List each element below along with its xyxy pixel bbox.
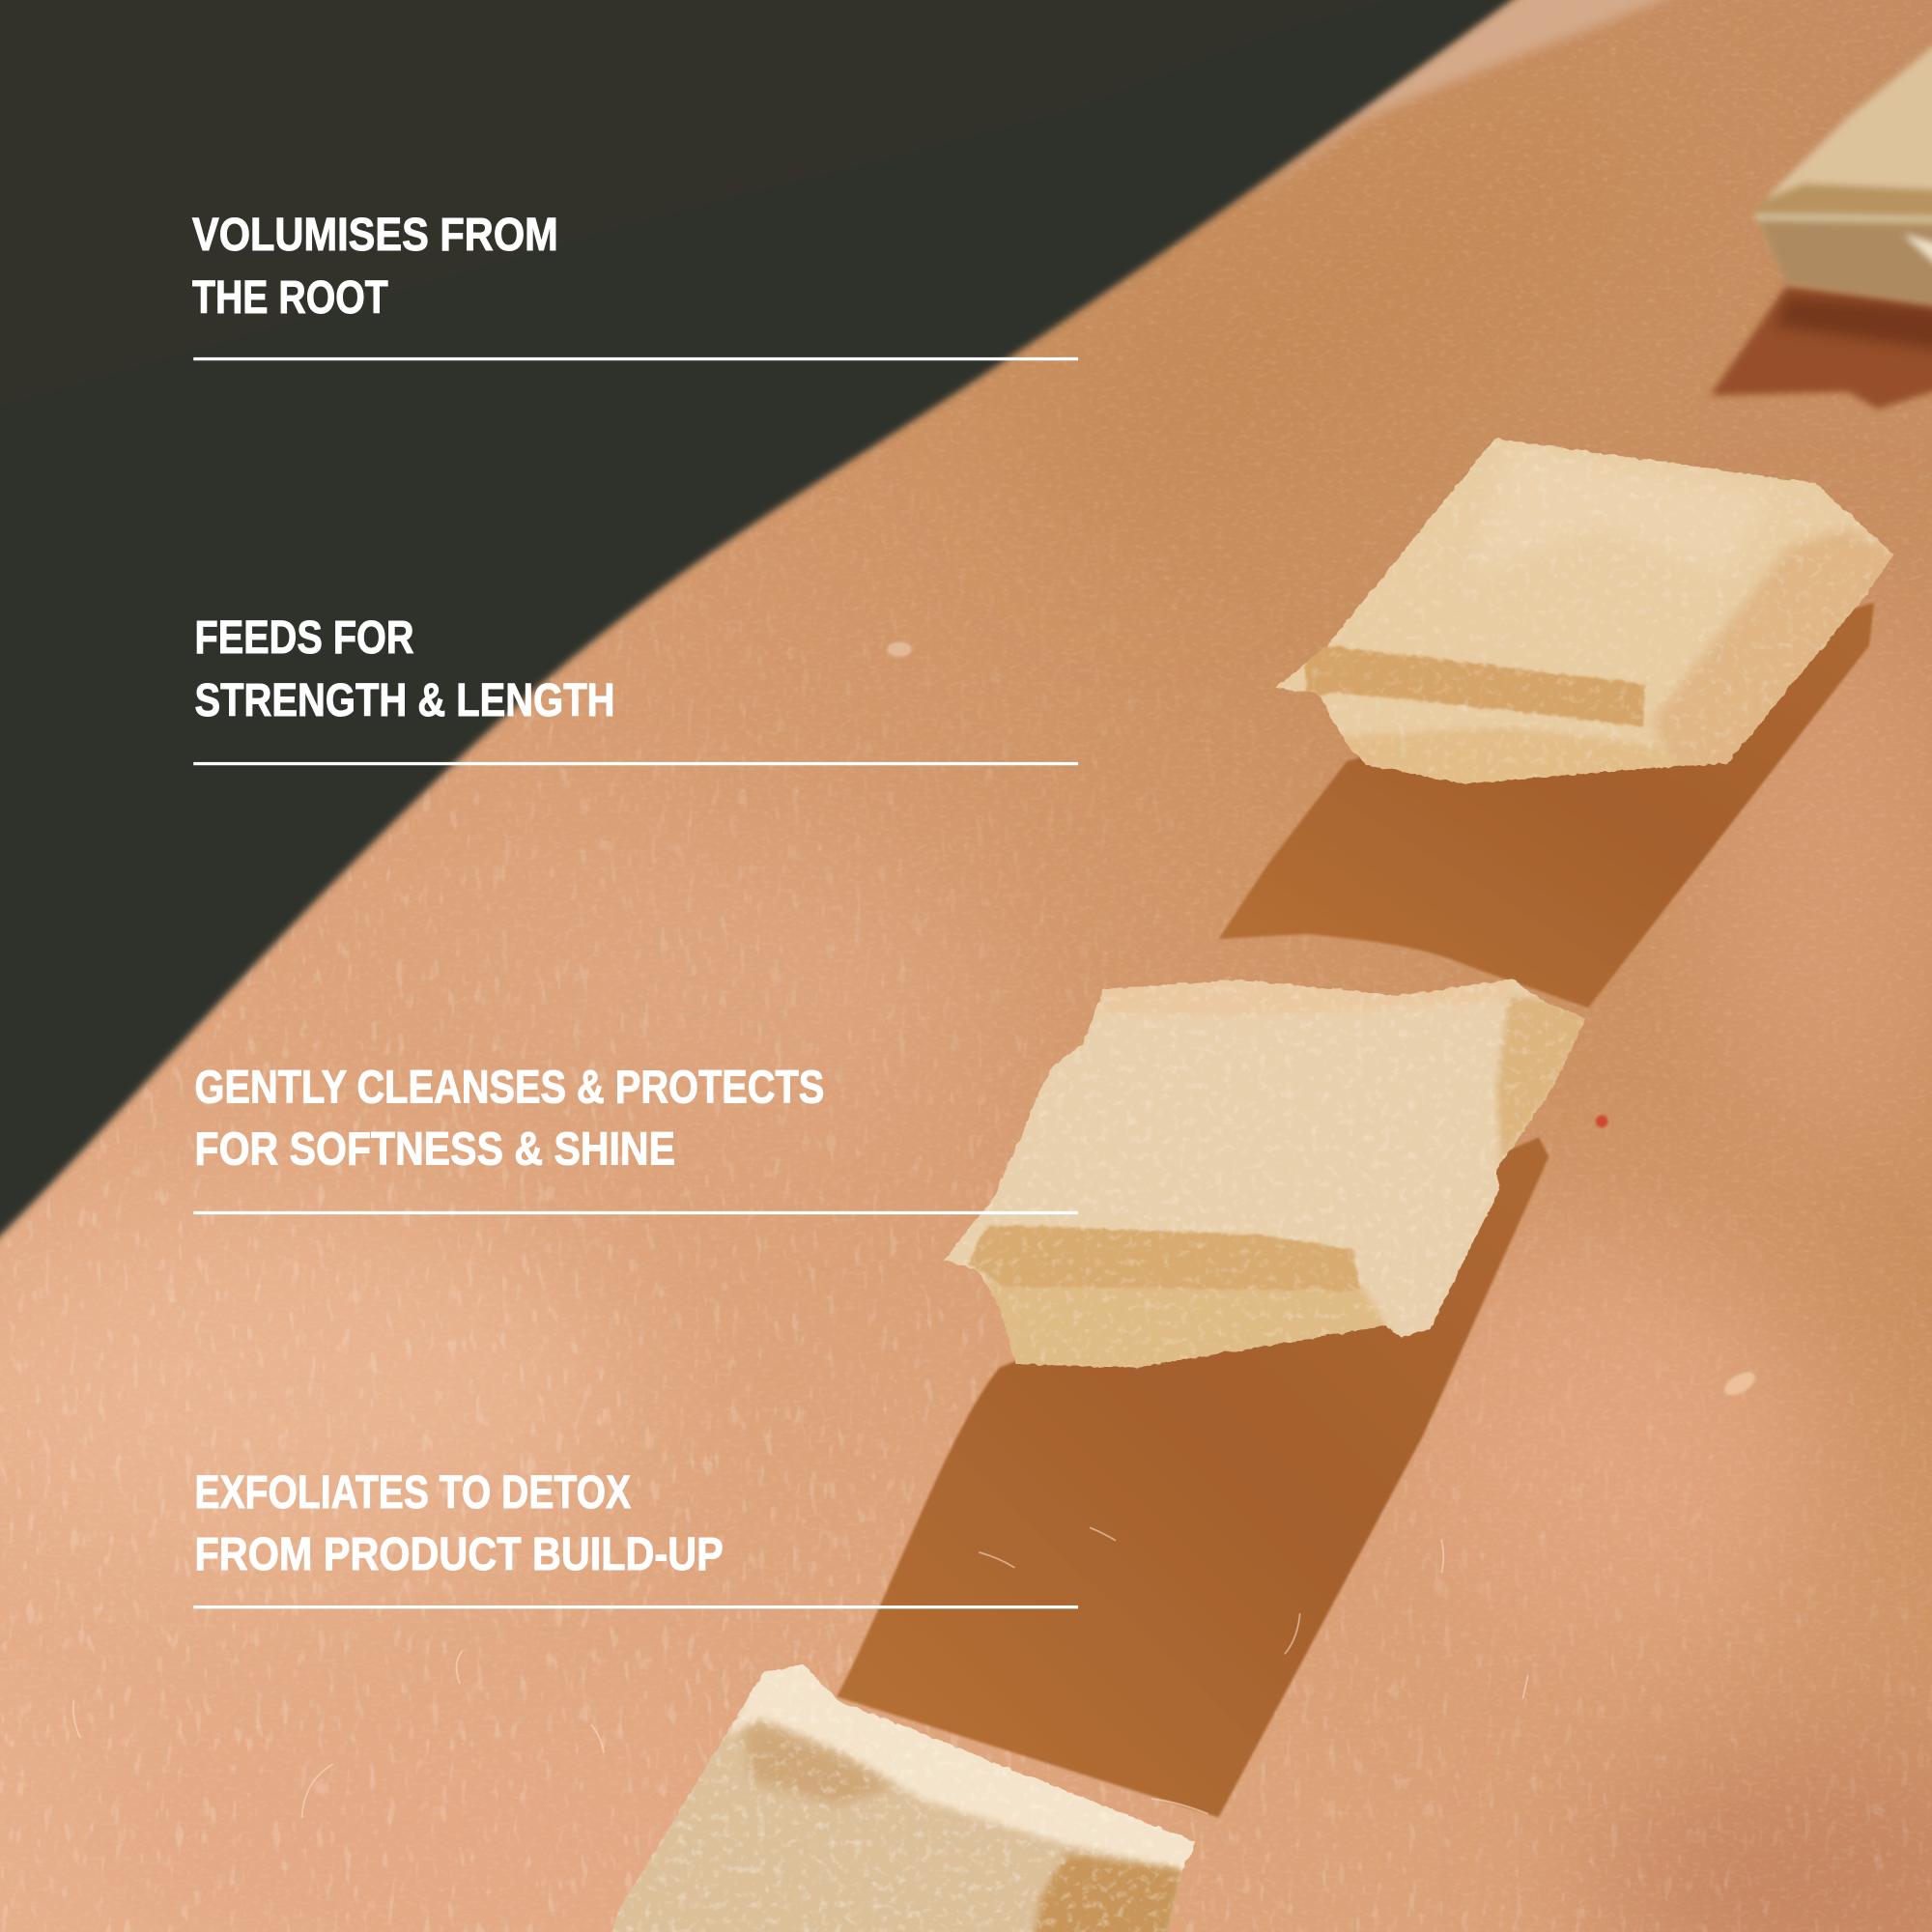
soap bar 1 <box>1754 37 1932 308</box>
benefit 2 heading: FEEDS FOR <box>195 611 414 664</box>
skin details: blemish and flecks <box>73 642 1759 1817</box>
soap bar 3 <box>943 980 1585 1369</box>
benefit 3 <box>193 1062 1078 1214</box>
benefit 3 heading: FOR SOFTNESS & SHINE <box>195 1122 675 1175</box>
soap bar 4 <box>604 1651 1208 1932</box>
benefit 2 <box>193 611 1078 765</box>
bar 1 shadow <box>1710 286 1932 409</box>
bar 2 shadow <box>1218 603 1874 1008</box>
benefit 4 heading: FROM PRODUCT BUILD-UP <box>195 1528 724 1580</box>
benefit 4 heading: EXFOLIATES TO DETOX <box>195 1466 631 1519</box>
benefit 1 heading <box>192 209 558 324</box>
background: dark shadow area <box>0 0 1552 1273</box>
benefit 2 heading <box>195 611 614 726</box>
benefit 4 <box>193 1466 1078 1608</box>
benefit 1 <box>192 209 1078 360</box>
benefit 1 heading: VOLUMISES FROM <box>192 209 558 261</box>
skin highlight along the shadow edge <box>1244 0 1688 203</box>
benefit 3 heading <box>195 1062 824 1175</box>
benefit 4 heading <box>195 1466 724 1580</box>
bar 3 shadow <box>837 1137 1548 1817</box>
benefit 3 heading: GENTLY CLEANSES & PROTECTS <box>195 1062 824 1114</box>
benefit 1 heading: THE ROOT <box>192 271 388 324</box>
benefit 2 heading: STRENGTH & LENGTH <box>195 674 614 726</box>
soap bar 2 <box>1275 438 1894 784</box>
